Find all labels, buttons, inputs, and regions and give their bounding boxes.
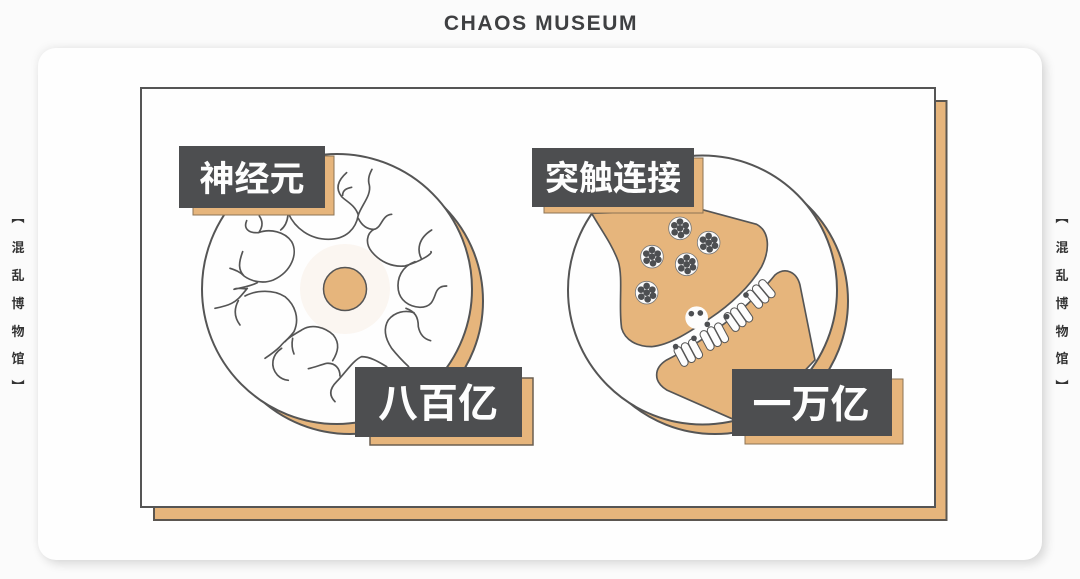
left side vertical text: 物 xyxy=(11,321,25,340)
label: 八百亿 xyxy=(355,367,533,445)
title: CHAOS MUSEUM xyxy=(444,12,638,35)
panel: synapse xyxy=(532,148,903,444)
right side vertical text: 馆 xyxy=(1055,348,1069,367)
label: 一万亿 xyxy=(732,369,903,444)
label: 八百亿: 八百亿 xyxy=(378,371,498,429)
synaptic vesicles xyxy=(635,217,720,304)
neuron dendrites xyxy=(215,169,447,402)
upper neuron terminal xyxy=(592,210,767,347)
panel: neuron xyxy=(179,146,533,445)
right side vertical text xyxy=(1055,207,1069,395)
left side vertical text: 博 xyxy=(11,293,25,312)
label: 突触连接 xyxy=(532,148,703,213)
right side vertical text: 乱 xyxy=(1055,265,1069,284)
label: 神经元: 神经元 xyxy=(199,151,305,202)
frame with orange offset shadow xyxy=(141,88,946,520)
neuron nucleus with halo xyxy=(300,244,390,334)
right side vertical text: ︼ xyxy=(1055,376,1069,395)
label: 一万亿: 一万亿 xyxy=(752,374,870,430)
left side vertical text: ︻ xyxy=(11,207,25,226)
right side vertical text: 混 xyxy=(1055,237,1069,256)
neurotransmitter dots xyxy=(673,292,749,349)
left side vertical text: ︼ xyxy=(11,376,25,395)
label: 突触连接: 突触连接 xyxy=(545,151,681,200)
left side vertical text: 乱 xyxy=(11,265,25,284)
receptors xyxy=(673,278,777,368)
label: 神经元 xyxy=(179,146,334,215)
left side vertical text: 馆 xyxy=(11,348,25,367)
right side vertical text: 物 xyxy=(1055,321,1069,340)
synapse circle with orange crescent xyxy=(568,156,848,434)
right side vertical text: ︻ xyxy=(1055,207,1069,226)
left side vertical text xyxy=(11,207,25,395)
releasing vesicle xyxy=(685,306,708,329)
synapse drawing xyxy=(592,210,815,419)
lower neuron terminal xyxy=(657,271,815,419)
left side vertical text: 混 xyxy=(11,237,25,256)
right side vertical text: 博 xyxy=(1055,293,1069,312)
neuron circle with orange crescent xyxy=(202,154,483,434)
